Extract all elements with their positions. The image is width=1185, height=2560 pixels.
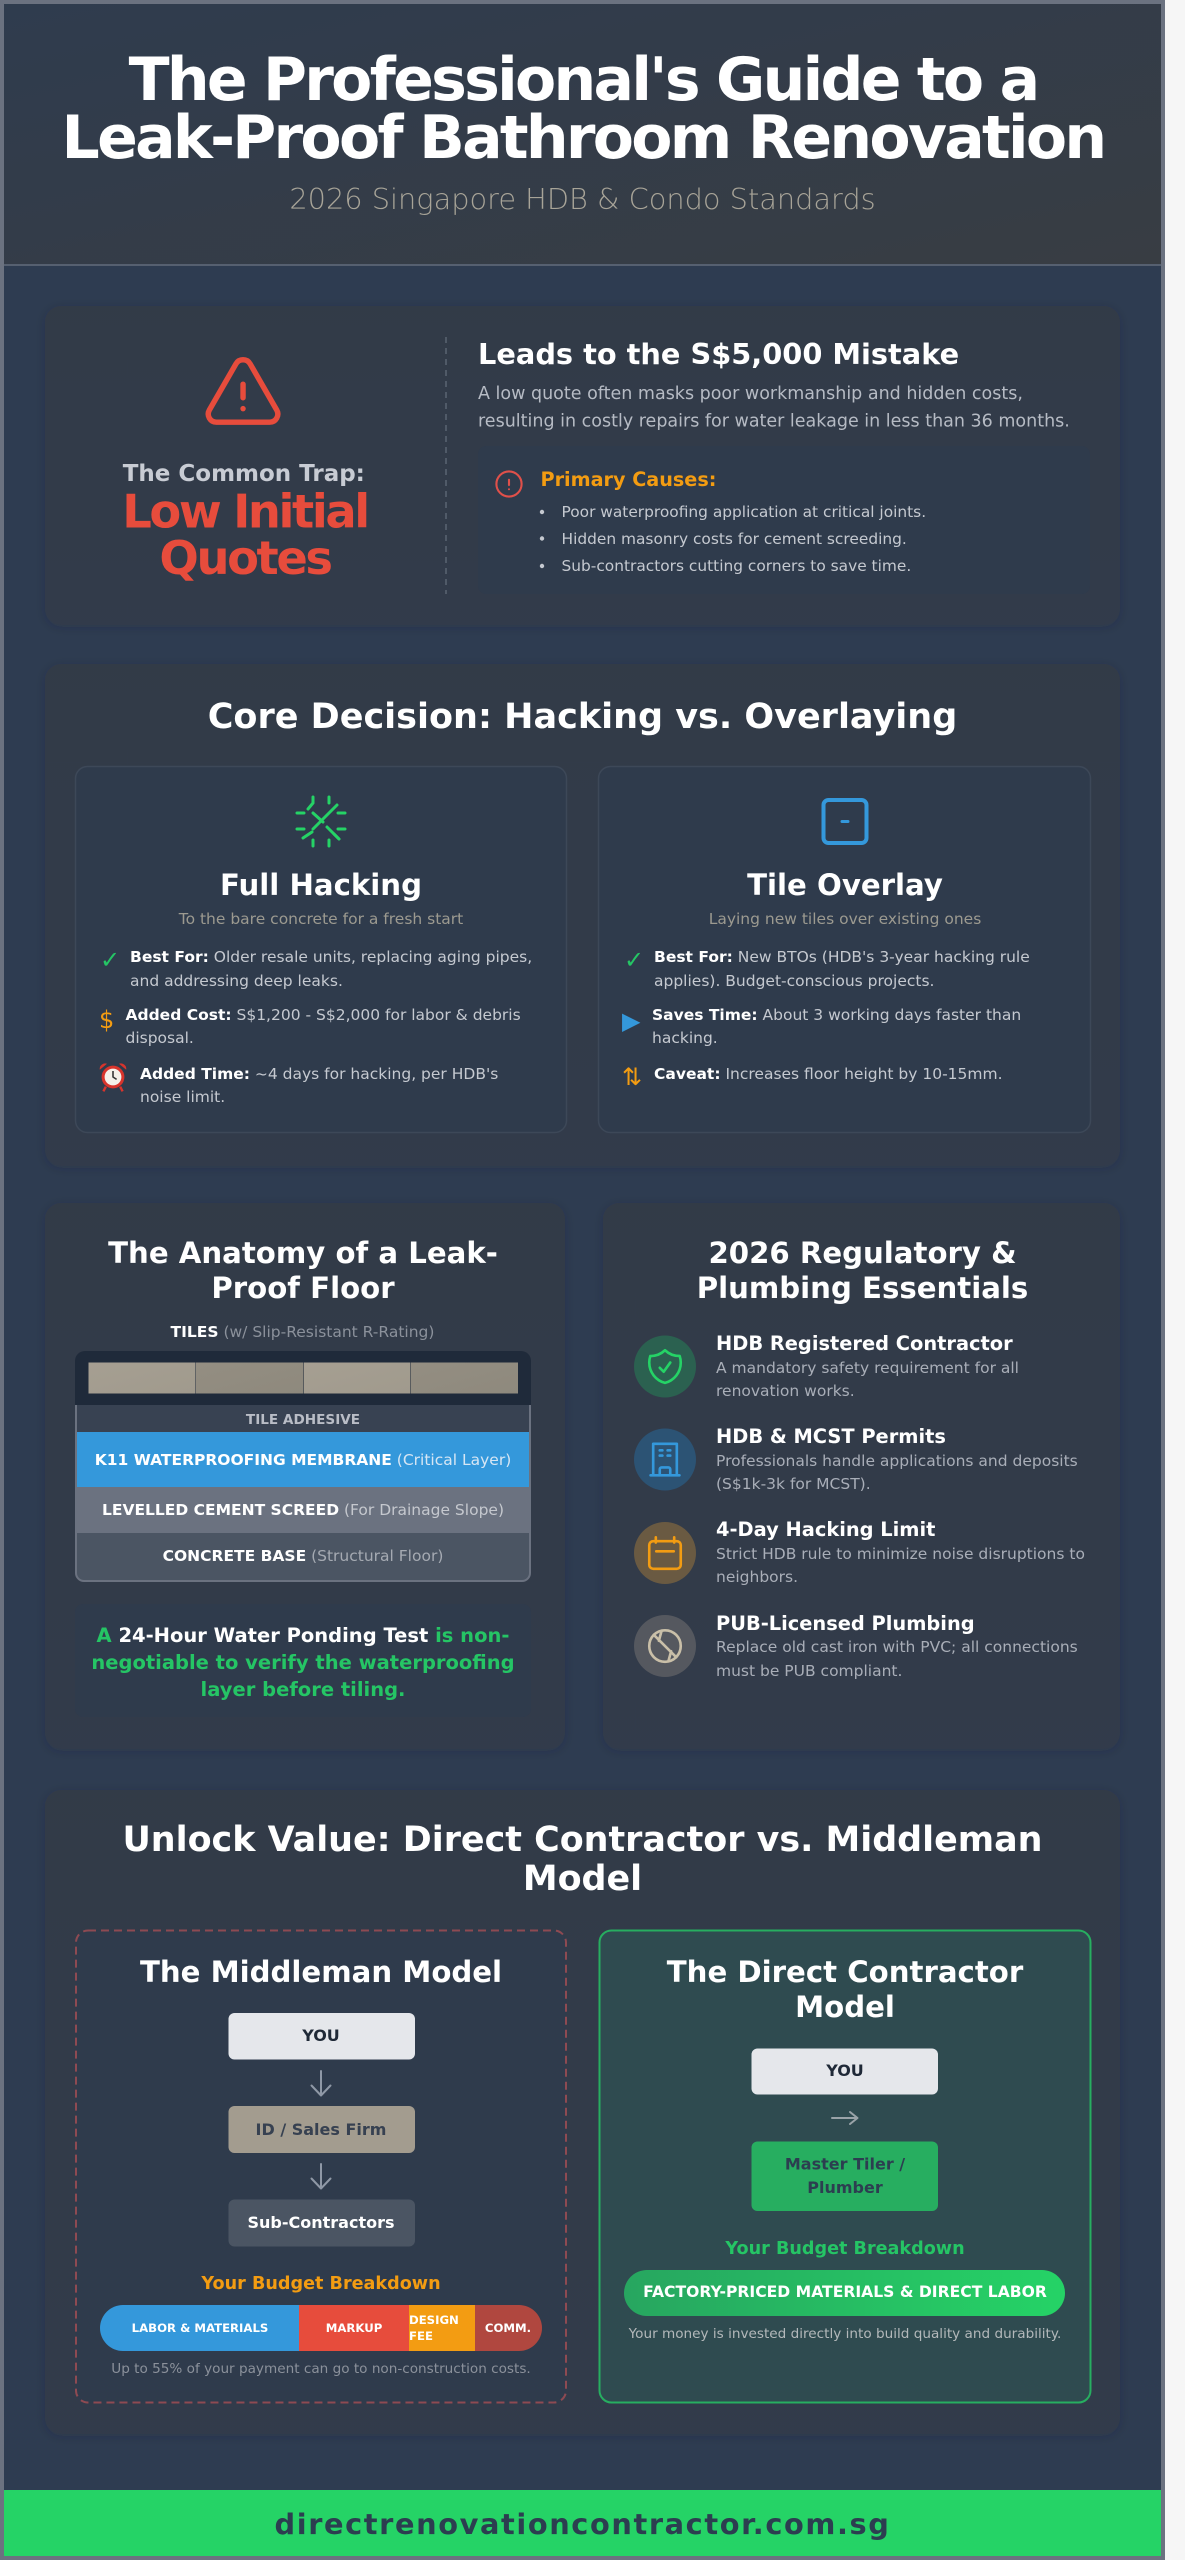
causes heading: Primary Causes:	[540, 468, 716, 491]
screed layer	[76, 1487, 530, 1533]
added cost: S$1,200 - S$2,000 for labor & debris	[232, 1006, 521, 1024]
item: hdb registered contractor: renovation works.	[716, 1382, 855, 1400]
added cost: Added Cost:	[126, 1006, 232, 1024]
budget bar	[100, 2305, 542, 2351]
best for	[100, 946, 532, 990]
section heading: Core Decision: Hacking vs. Overlaying	[208, 697, 957, 737]
footer: directrenovationcontractor.com.sg	[275, 2507, 890, 2541]
heading: Full Hacking	[220, 868, 422, 902]
flow step: you: YOU	[825, 2061, 864, 2080]
budget bar: FACTORY-PRICED MATERIALS & DIRECT LABOR	[643, 2283, 1047, 2301]
footer	[4, 2490, 1161, 2556]
trap headline: Quotes	[159, 531, 331, 585]
budget bar	[624, 2270, 1065, 2316]
mistake text: A low quote often masks poor workmanship and hidden costs,	[478, 384, 1023, 404]
causes list: Sub-contractors cutting corners to save time.	[562, 557, 911, 575]
title: Leak-Proof Bathroom Renovation	[62, 103, 1104, 173]
membrane layer	[75, 1432, 531, 1487]
added cost	[99, 1006, 521, 1047]
item: permits: (S$1k-3k for MCST).	[716, 1475, 871, 1493]
caveat: Increases floor height by 10-15mm.	[721, 1065, 1003, 1083]
flow step: you	[228, 2013, 415, 2060]
panel: anatomy of floor	[45, 1203, 565, 1749]
heading: Proof Floor	[211, 1271, 395, 1305]
ponding test callout: layer before tiling.	[201, 1678, 405, 1701]
budget label: Your Budget Breakdown	[200, 2274, 441, 2294]
caveat: Caveat:	[654, 1065, 721, 1083]
heading: The Direct Contractor	[667, 1955, 1024, 1989]
arrow	[312, 2071, 330, 2096]
panel: regulatory essentials	[603, 1203, 1120, 1749]
ponding test callout	[75, 1604, 531, 1717]
heading: The Anatomy of a Leak-	[108, 1236, 498, 1270]
item: hacking limit: Strict HDB rule to minimize noise disruptions to	[716, 1545, 1085, 1563]
heading: The Middleman Model	[140, 1955, 502, 1989]
direct contractor model	[600, 1930, 1090, 2402]
icon: alarm clock	[100, 1063, 126, 1091]
section heading: Unlock Value: Direct Contractor vs. Middleman	[122, 1820, 1043, 1860]
saves time: Saves Time:	[652, 1006, 758, 1024]
heading: Plumbing Essentials	[697, 1271, 1028, 1305]
heading: Model	[795, 1990, 895, 2024]
best for: applies). Budget-conscious projects.	[654, 972, 934, 990]
flow step: master tiler: Master Tiler /	[785, 2154, 905, 2174]
ponding test callout: negotiable to verify the waterproofing	[91, 1651, 515, 1674]
flow step: sub-contractors	[228, 2200, 415, 2246]
header	[4, 4, 1161, 266]
heading: 2026 Regulatory &	[708, 1236, 1017, 1270]
best for: ✓	[100, 946, 120, 974]
item: plumbing: PUB-Licensed Plumbing	[716, 1612, 975, 1635]
adhesive layer	[76, 1405, 530, 1432]
item: hdb registered contractor	[634, 1332, 1019, 1400]
section heading: Model	[523, 1859, 642, 1899]
icon: warning triangle	[208, 360, 278, 422]
subtitle: 2026 Singapore HDB & Condo Standards	[289, 182, 876, 216]
added cost: disposal.	[126, 1029, 194, 1047]
added time	[100, 1063, 498, 1106]
adhesive layer: TILE ADHESIVE	[246, 1412, 360, 1428]
icon: overlay tile	[824, 800, 866, 843]
best for: New BTOs (HDB's 3-year hacking rule	[733, 948, 1030, 966]
concrete layer: CONCRETE BASE (Structural Floor)	[163, 1547, 443, 1565]
flow step: master tiler	[752, 2142, 938, 2211]
option: full hacking	[76, 766, 566, 1132]
best for	[624, 946, 1030, 990]
title: The Professional's Guide to a	[129, 45, 1037, 115]
budget bar: MARKUP	[326, 2321, 383, 2335]
middleman model	[76, 1930, 566, 2402]
saves time	[622, 1006, 1021, 1047]
best for: ✓	[624, 946, 644, 974]
added time: ~4 days for hacking, per HDB's	[250, 1065, 498, 1083]
item: hdb registered contractor: A mandatory safety requirement for all	[716, 1359, 1019, 1377]
flow step: sub-contractors: Sub-Contractors	[247, 2213, 395, 2232]
panel: common trap	[45, 306, 1120, 625]
saves time: hacking.	[652, 1029, 718, 1047]
flow step: you: YOU	[301, 2026, 340, 2045]
panel: direct vs middleman	[45, 1790, 1120, 2434]
ponding test callout: A 24-Hour Water Ponding Test is non-	[97, 1624, 509, 1647]
floor layer diagram	[75, 1351, 531, 1581]
concrete layer	[76, 1533, 530, 1581]
budget bar: LABOR & MATERIALS	[132, 2321, 268, 2335]
item: hacking limit: 4-Day Hacking Limit	[716, 1518, 935, 1541]
added time: Added Time:	[140, 1065, 250, 1083]
flow step: id firm: ID / Sales Firm	[256, 2120, 386, 2139]
flow step: you	[752, 2048, 938, 2094]
icon: hacking	[297, 797, 345, 846]
item: hacking limit	[634, 1518, 1085, 1586]
item: plumbing: must be PUB compliant.	[716, 1662, 902, 1680]
item: plumbing	[634, 1612, 1078, 1680]
best for: Older resale units, replacing aging pipes,	[209, 948, 532, 966]
best for: Best For:	[130, 948, 209, 966]
best for: Best For:	[654, 948, 733, 966]
budget label: Your Budget Breakdown	[724, 2239, 965, 2259]
saves time: ▶	[622, 1007, 641, 1035]
membrane layer: K11 WATERPROOFING MEMBRANE (Critical Layer)	[95, 1451, 511, 1469]
arrow	[832, 2112, 858, 2124]
causes list: Hidden masonry costs for cement screeding.	[562, 530, 907, 548]
caveat	[622, 1063, 1003, 1091]
best for: and addressing deep leaks.	[130, 972, 343, 990]
mistake text: resulting in costly repairs for water leakage in less than 36 months.	[478, 412, 1070, 432]
icon: alert circle	[496, 471, 522, 497]
causes list: Poor waterproofing application at critical joints.	[562, 503, 926, 521]
panel: core decision	[45, 664, 1120, 1166]
arrow	[312, 2164, 330, 2188]
causes list	[540, 503, 926, 575]
tile layer	[88, 1362, 518, 1394]
flow step: id firm	[228, 2106, 415, 2153]
item: plumbing: Replace old cast iron with PVC; all connections	[716, 1638, 1078, 1656]
item: permits: HDB & MCST Permits	[716, 1425, 946, 1448]
item: permits	[634, 1425, 1078, 1493]
subheading: Laying new tiles over existing ones	[709, 910, 981, 928]
budget bar: DESIGN	[409, 2313, 459, 2327]
budget bar: COMM.	[485, 2321, 531, 2335]
primary causes box	[478, 446, 1090, 594]
item: permits: Professionals handle applications and deposits	[716, 1452, 1078, 1470]
option: tile overlay	[598, 766, 1090, 1132]
mistake heading: Leads to the S$5,000 Mistake	[478, 337, 959, 371]
caption: Up to 55% of your payment can go to non-construction costs.	[111, 2361, 531, 2377]
trap label: The Common Trap:	[123, 461, 365, 487]
heading: Tile Overlay	[747, 868, 943, 902]
caption: Your money is invested directly into build quality and durability.	[628, 2326, 1061, 2342]
budget bar: FEE	[409, 2329, 433, 2343]
added cost: $	[99, 1006, 114, 1034]
subheading: To the bare concrete for a fresh start	[178, 910, 463, 928]
screed layer: LEVELLED CEMENT SCREED (For Drainage Slope)	[102, 1501, 504, 1519]
saves time: About 3 working days faster than	[758, 1006, 1021, 1024]
flow step: master tiler: Plumber	[807, 2178, 883, 2197]
item: hdb registered contractor: HDB Registered Contractor	[716, 1332, 1013, 1355]
tiles label: TILES (w/ Slip-Resistant R-Rating)	[171, 1323, 434, 1341]
caveat: ⇅	[622, 1063, 642, 1091]
trap headline: Low Initial	[122, 484, 368, 538]
added time: noise limit.	[140, 1088, 225, 1106]
item: hacking limit: neighbors.	[716, 1568, 798, 1586]
